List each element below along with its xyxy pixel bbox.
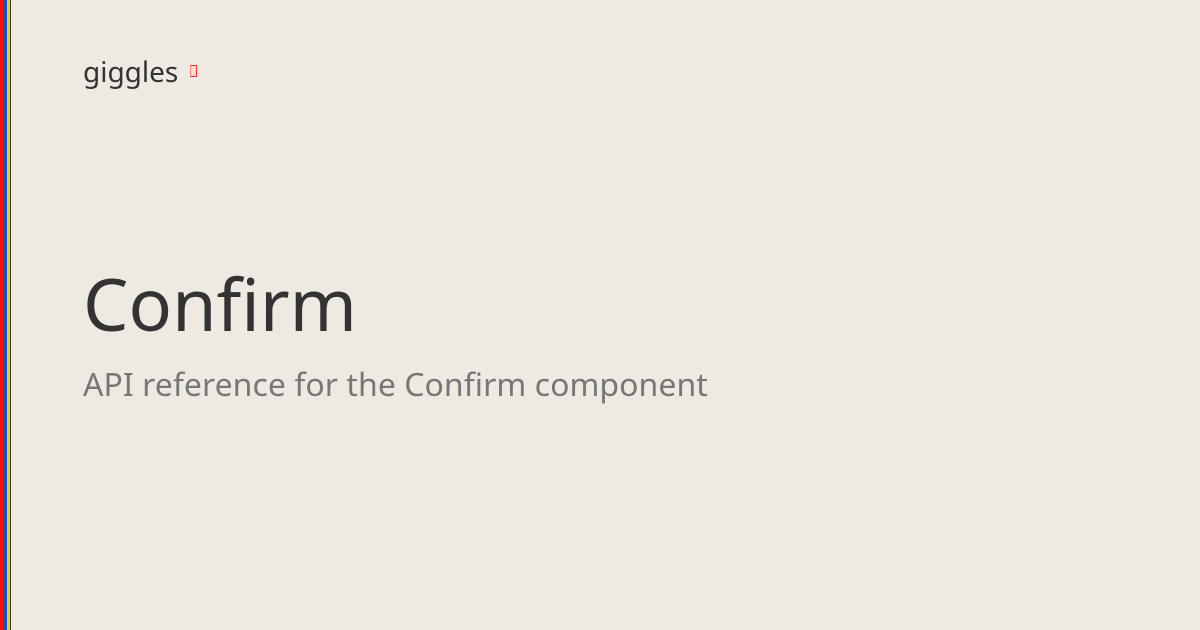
decorative stripe band	[0, 0, 11, 630]
brand name: giggles	[83, 53, 178, 91]
subtitle: API reference for the Confirm component	[83, 363, 708, 406]
icon: missing glyph box	[190, 65, 197, 77]
title: Confirm	[83, 255, 357, 353]
